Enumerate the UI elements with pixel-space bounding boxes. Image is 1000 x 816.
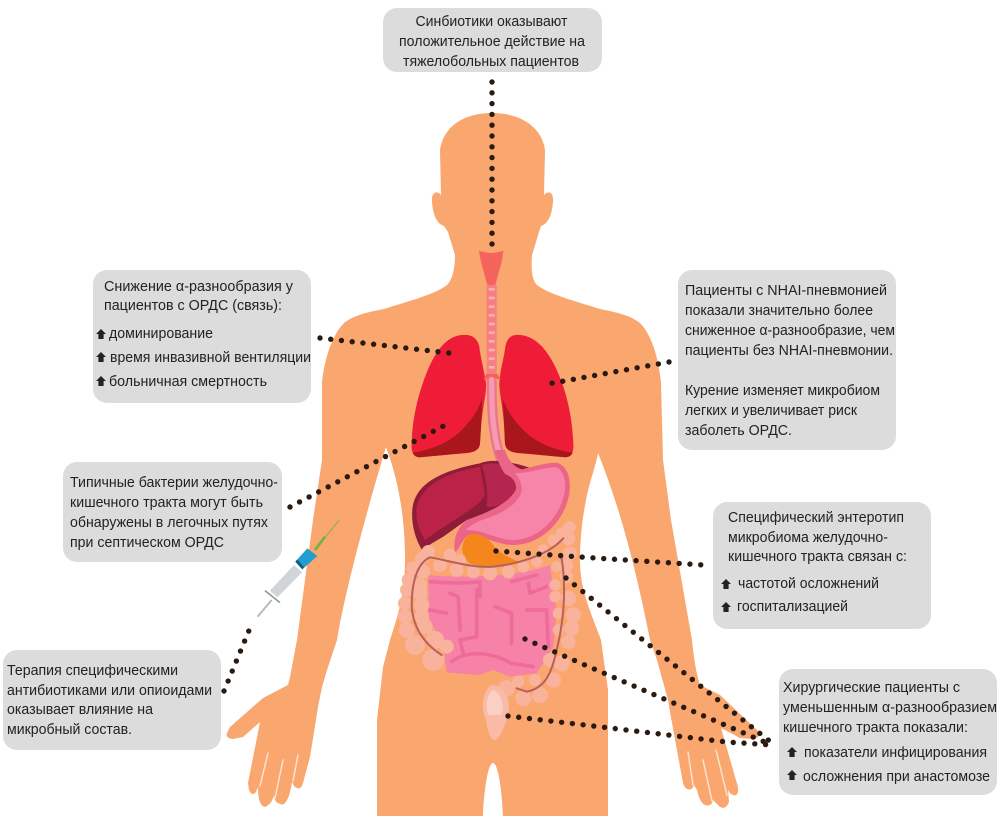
stomach: [454, 450, 570, 553]
appendix and rectum: [483, 685, 509, 740]
callout: therapy: [3, 650, 221, 750]
dotted leader: small intestine to surgical box: [525, 639, 772, 745]
right lung: [499, 335, 573, 457]
digestive organs: [398, 450, 581, 740]
callout: surgical patients: Хирургические пациенты с: [783, 679, 960, 696]
callout: GI bacteria in lungs: кишечного тракта могут быть: [70, 494, 263, 511]
callout: ARDS alpha diversity: пациентов с ОРДС (связь):: [104, 297, 282, 314]
callout: enterotype: [713, 502, 931, 629]
icon: syringe: [258, 520, 339, 617]
callout: ARDS alpha diversity: Снижение α-разнообразия у: [104, 278, 293, 295]
callout: therapy: оказывает влияние на: [7, 701, 154, 718]
callout: NHAI pneumonia and smoking: показали значительно более: [685, 302, 873, 319]
callout: surgical patients: показатели инфицирования: [804, 744, 987, 761]
callout: GI bacteria in lungs: обнаружены в легочных путях: [70, 514, 268, 531]
callout: surgical patients: осложнения при анастомозе: [803, 768, 990, 785]
callout: enterotype: госпитализацией: [737, 598, 848, 615]
callout: enterotype: кишечного тракта связан с:: [728, 548, 907, 565]
callout: NHAI pneumonia and smoking: Пациенты с NHAI-пневмонией: [685, 282, 887, 299]
colon inner line: [412, 538, 564, 692]
left lung: [412, 335, 486, 457]
callout: surgical patients: [779, 669, 997, 795]
dotted leader: diversity box to lung: [320, 338, 449, 353]
callout: therapy: антибиотиками или опиоидами: [7, 682, 212, 699]
small intestine: [428, 565, 557, 677]
dotted leader: symbiotics to throat: [489, 82, 495, 245]
callout: ARDS alpha diversity: [93, 270, 311, 403]
callout: ARDS alpha diversity: доминирование: [109, 325, 213, 342]
dotted leader: bacteria box to lung: [290, 422, 451, 507]
callout: GI bacteria in lungs: [63, 462, 282, 562]
callout: ARDS alpha diversity: больничная смертность: [109, 373, 267, 390]
callout: therapy: микробный состав.: [7, 721, 132, 738]
callout: enterotype: Специфический энтеротип: [728, 509, 904, 526]
callout: ARDS alpha diversity: время инвазивной вентиляции: [110, 349, 311, 366]
dotted leader: enterotype box to pancreas: [496, 551, 704, 565]
throat: [479, 251, 503, 285]
dotted leader: therapy box to syringe: [224, 628, 250, 691]
liver: [412, 461, 537, 549]
esophagus: [492, 378, 505, 470]
windpipe: [483, 285, 501, 379]
dotted leader: rectum to surgical box: [508, 716, 772, 745]
dotted leader: NHAI box to lung: [542, 362, 669, 385]
pancreas: [462, 534, 518, 566]
callout: enterotype: микробиома желудочно-: [728, 529, 888, 546]
callout: symbiotics: тяжелобольных пациентов: [403, 53, 579, 70]
callout: symbiotics: положительное действие на: [399, 33, 586, 50]
large intestine: [398, 521, 581, 706]
callout: NHAI pneumonia and smoking: легких и увеличивает риск: [685, 402, 857, 419]
callout: surgical patients: кишечного тракта показали:: [783, 719, 968, 736]
callout: NHAI pneumonia and smoking: Курение изменяет микробиом: [685, 382, 880, 399]
callout: NHAI pneumonia and smoking: сниженное α-разнообразие, чем: [685, 322, 895, 339]
callout: enterotype: частотой осложнений: [738, 575, 879, 592]
callout: symbiotics: [383, 8, 602, 72]
callout: GI bacteria in lungs: Типичные бактерии желудочно-: [70, 474, 278, 491]
human body silhouette: [227, 113, 759, 816]
callout: NHAI pneumonia and smoking: заболеть ОРДС.: [685, 422, 792, 439]
callout: symbiotics: Синбиотики оказывают: [416, 13, 568, 30]
callout: therapy: Терапия специфическими: [7, 662, 178, 679]
callout: NHAI pneumonia and smoking: пациенты без NHAI-пневмонии.: [685, 342, 893, 359]
trachea and lungs: [412, 251, 573, 470]
callout: GI bacteria in lungs: при септическом ОРДС: [70, 534, 224, 551]
dotted leader: colon to surgical box: [566, 578, 772, 743]
callout: NHAI pneumonia and smoking: [678, 270, 896, 450]
